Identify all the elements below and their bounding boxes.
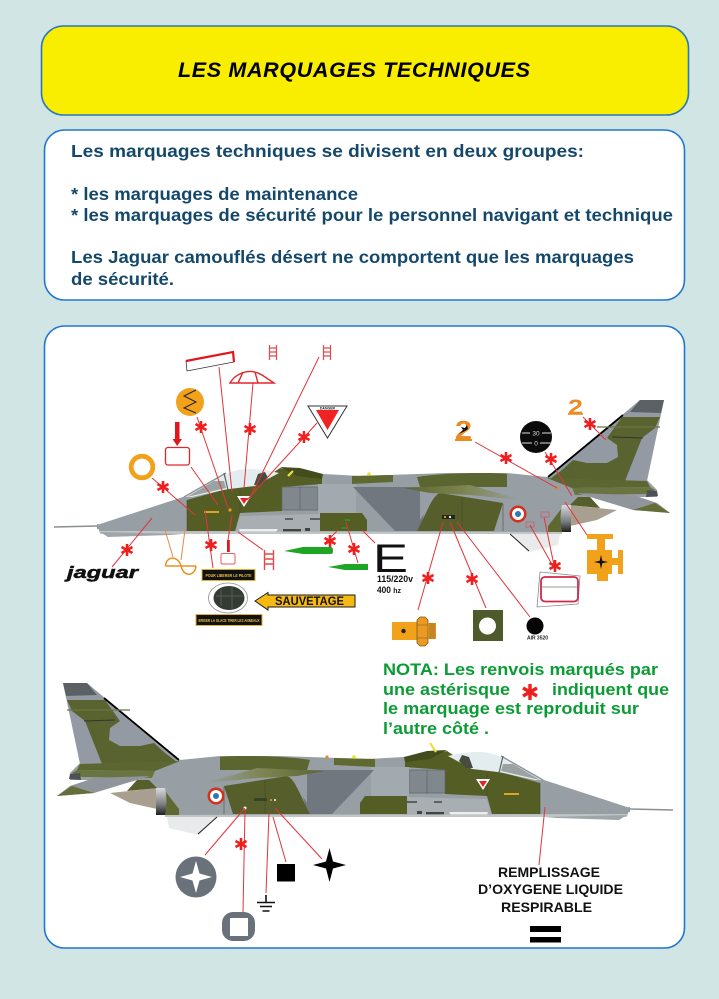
sauvetage arrow: SAUVETAGE: [275, 596, 344, 608]
oxygen label: RESPIRABLE: [501, 899, 592, 915]
note: une astérisque: [383, 681, 510, 699]
placard: briser la glace: BRISER LA GLACE TIRER LES ANNEAUX: [198, 618, 260, 623]
intro text: [71, 141, 673, 289]
aircraft: lower side view: [57, 683, 673, 835]
icon: black square: [277, 864, 295, 882]
oxygen label: [478, 864, 623, 915]
icon: double bar: [530, 926, 561, 942]
intro text: * les marquages de maintenance: [71, 184, 358, 204]
note asterisk: [523, 684, 537, 700]
intro text: Les Jaguar camouflés désert ne comportent que les marquages: [71, 247, 634, 267]
icon: white panel with red edge: [186, 352, 234, 371]
icon: danger triangle: [308, 406, 347, 438]
icon: orange ring: [131, 456, 153, 478]
panel: aircraft markings: [44, 326, 684, 948]
icon: black dial: 30: [532, 430, 540, 438]
placard: briser la glace: [196, 614, 262, 626]
voltage marking: [373, 537, 413, 595]
icon: grey square with white square: [222, 912, 255, 941]
note: l’autre côté .: [383, 720, 489, 738]
icon: danger triangle: DANGER: [320, 406, 336, 410]
icon: red-framed plate: [537, 572, 580, 607]
icon: ground symbol: [257, 895, 275, 911]
icon: arrow into red box: [166, 422, 190, 465]
icon: canopy: [230, 371, 274, 383]
note: indiquent que: [552, 681, 669, 699]
note: [383, 661, 669, 738]
icon: ladder 2: [324, 345, 330, 360]
icon: black dial: [520, 421, 552, 453]
heading: LES MARQUAGES TECHNIQUES: [178, 58, 531, 82]
small marks: [237, 496, 251, 507]
voltage marking: 115/220v: [377, 574, 413, 584]
icon: green marker 2: [328, 564, 368, 570]
icon: black dial: 0: [534, 440, 538, 448]
letter E: E: [373, 537, 408, 581]
small marks: [476, 779, 490, 790]
intro text: de sécurité.: [71, 269, 174, 289]
roundel: [208, 788, 224, 804]
panel: title: [42, 26, 688, 115]
icon: green marker 1: [284, 547, 333, 554]
sauvetage arrow: [255, 592, 355, 610]
panel: introduction: [44, 130, 684, 300]
voltage marking: 400 hz: [377, 585, 401, 595]
icon: orange spring disc: [176, 388, 204, 416]
aircraft: upper side view: [54, 400, 670, 552]
jaguar logo: jaguar: [64, 563, 140, 582]
icon: bolt: [392, 617, 436, 646]
icon: olive square with white circle: [473, 610, 503, 641]
icon: ladder 1: [270, 345, 276, 360]
intro text: Les marquages techniques se divisent en deux groupes:: [71, 141, 584, 161]
oxygen label: D’OXYGENE LIQUIDE: [478, 881, 623, 897]
oxygen label: REMPLISSAGE: [498, 864, 600, 880]
roundel: [510, 506, 526, 522]
icon: orange wave symbol: [166, 558, 196, 574]
icon: orange 2: 2: [568, 396, 583, 419]
icon: black star: [313, 848, 346, 882]
icon: black disc air 3520: AIR 3520: [527, 636, 548, 642]
note: NOTA: Les renvois marqués par: [383, 661, 659, 679]
placard: pour liberer le pilote: POUR LIBERER LE PILOTE: [206, 573, 252, 578]
icon: orange valve: [587, 534, 623, 581]
icon: grey disc with white star: [176, 856, 216, 898]
icon: orange 2 with jet: 2: [455, 415, 472, 445]
icon: black disc air 3520: [526, 618, 548, 642]
icon: small arrow and box: [221, 540, 235, 564]
icon: ladder 3: [264, 550, 274, 570]
asterisks: [122, 418, 596, 850]
leader lines: [112, 357, 606, 912]
placard: pour liberer le pilote: [202, 570, 255, 580]
note: le marquage est reproduit sur: [383, 700, 640, 718]
icon: canopy hatch: [208, 583, 248, 613]
intro text: * les marquages de sécurité pour le personnel navigant et technique: [71, 205, 673, 225]
